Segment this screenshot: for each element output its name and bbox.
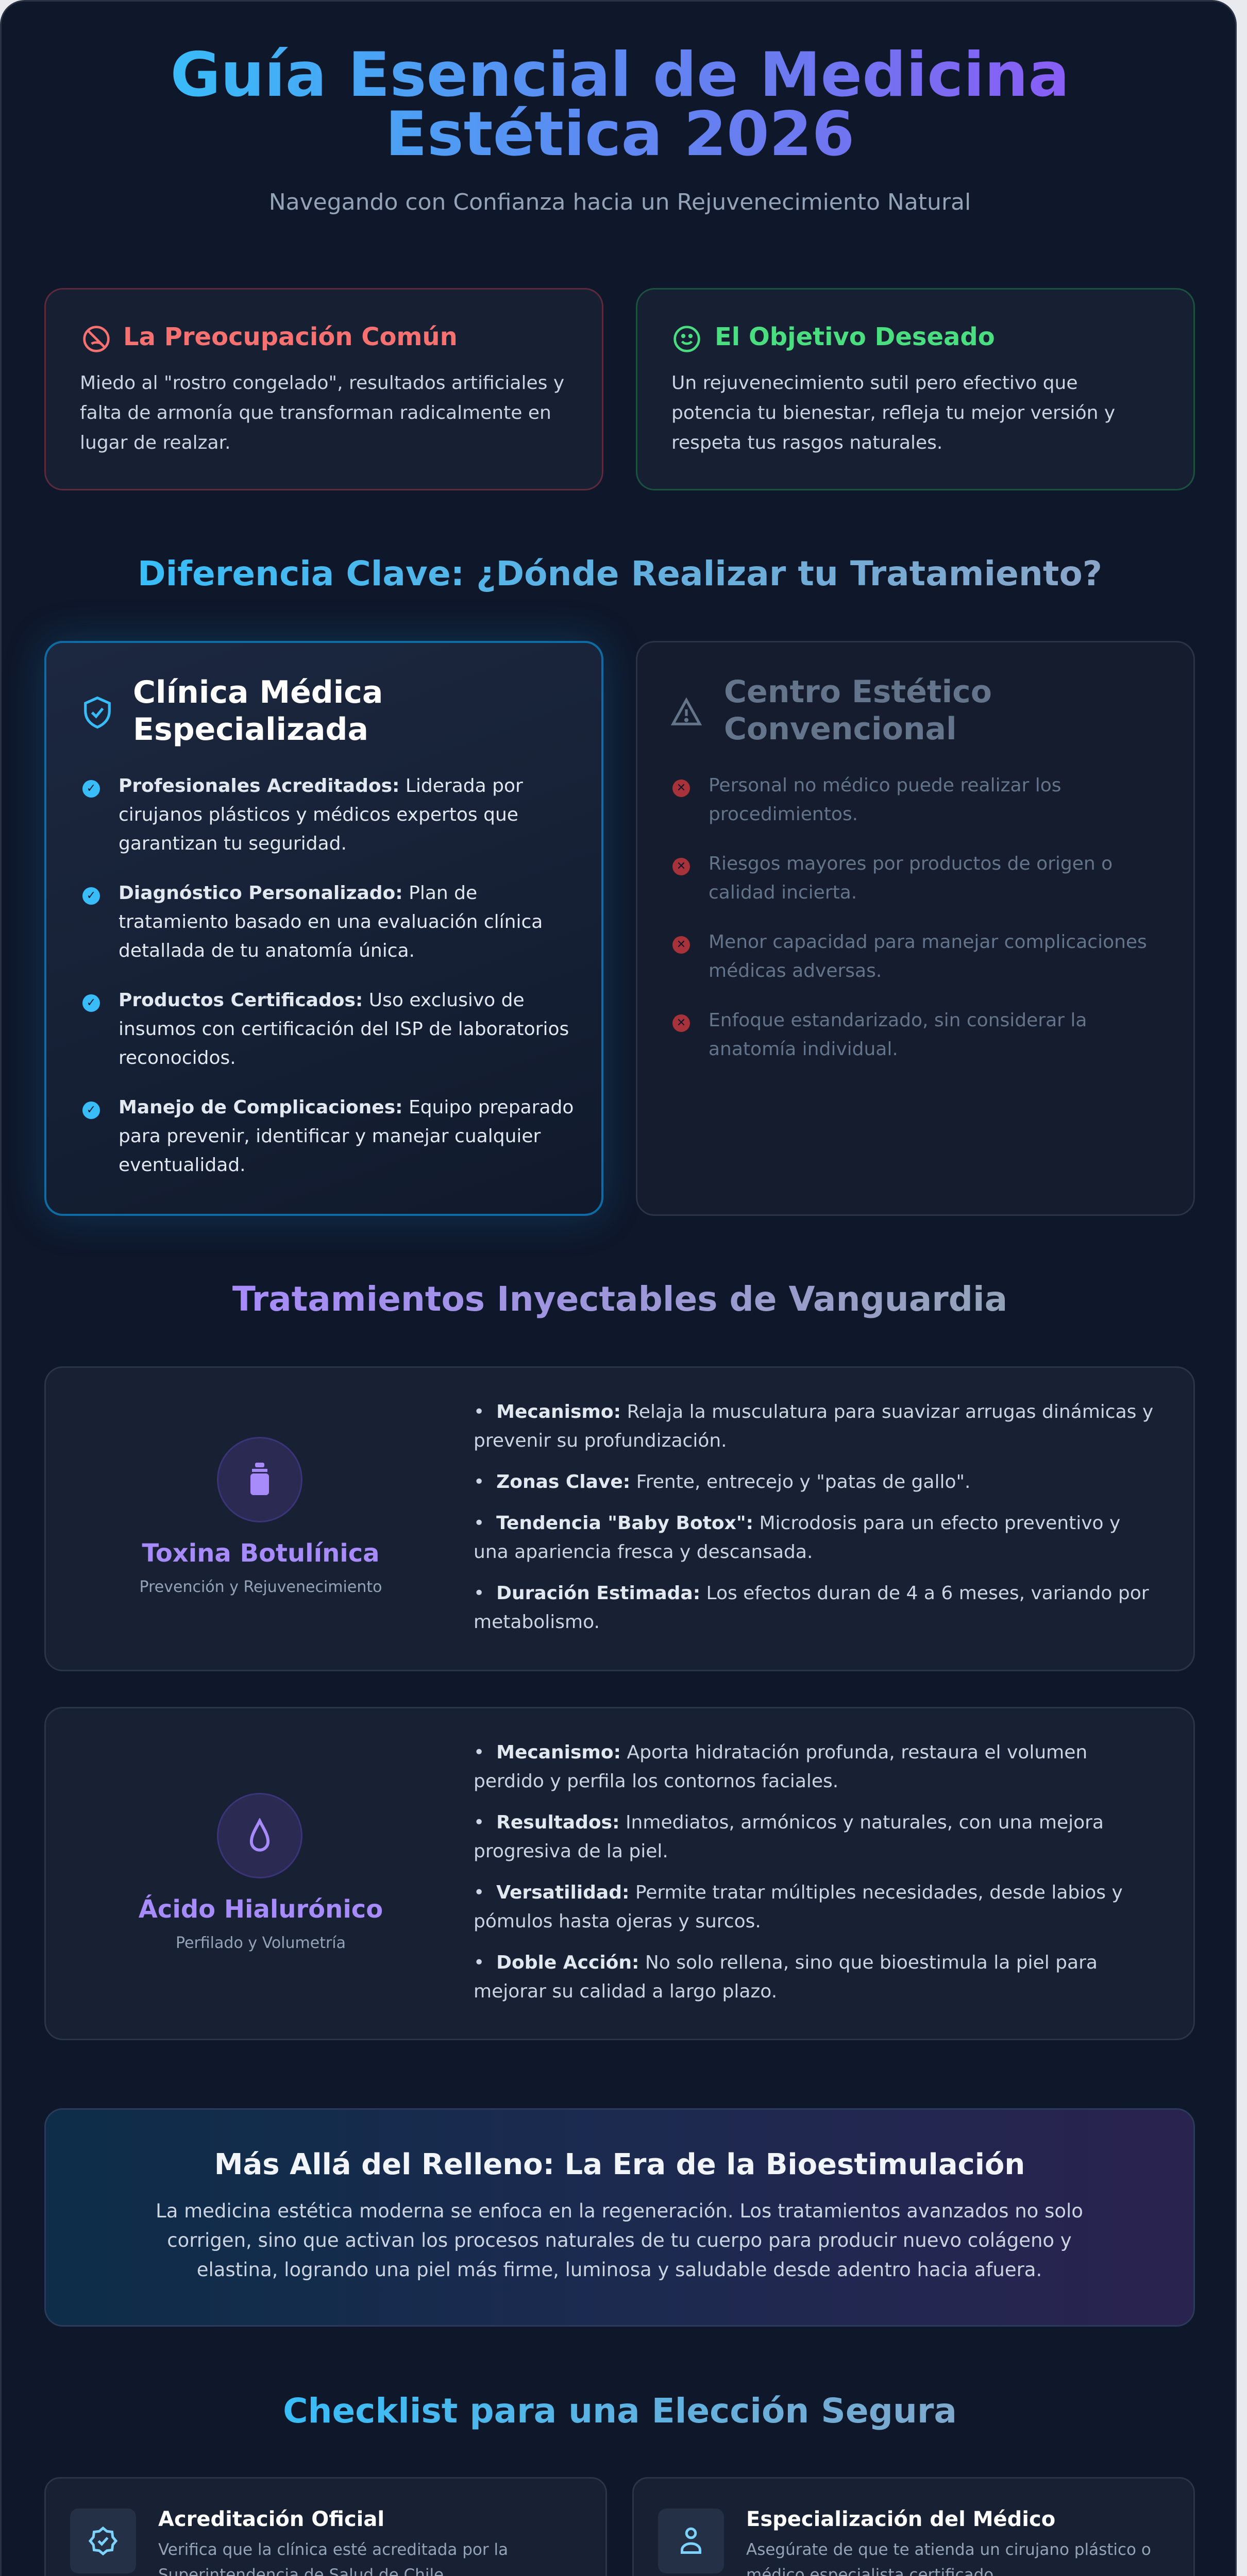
subtitle: Navegando con Confianza hacia un Rejuvenecimiento Natural	[269, 189, 971, 215]
title: Toxina Botulínica	[142, 1539, 380, 1568]
list	[82, 775, 574, 1176]
title: Estética 2026	[385, 99, 854, 170]
list: ✓	[87, 782, 96, 795]
title: Acreditación Oficial	[158, 2507, 384, 2531]
list: • Duración Estimada: Los efectos duran de 4 a 6 meses, variando por metabolismo.	[474, 1583, 1149, 1633]
subtitle: Prevención y Rejuvenecimiento	[140, 1578, 382, 1596]
list: • Resultados: Inmediatos, armónicos y naturales, con una mejora progresiva de la piel.	[474, 1812, 1104, 1862]
checklist: acreditacion	[44, 2477, 607, 2576]
title: Especialización del Médico	[746, 2507, 1055, 2531]
heading: Especializada	[133, 711, 368, 748]
list	[474, 1401, 1153, 1633]
heading	[724, 674, 992, 747]
list: ✕	[677, 860, 686, 873]
list: ✓	[87, 996, 96, 1009]
list: ✕	[677, 938, 686, 951]
list: Diagnóstico Personalizado: Plan de tratamiento basado en una evaluación clínica detallada de tu anatomía única.	[119, 883, 543, 961]
icon: smile	[673, 326, 700, 352]
heading: El Objetivo Deseado	[715, 323, 995, 351]
panel: goal	[636, 288, 1195, 490]
heading: diferencia clave: Diferencia Clave: ¿Dónde Realizar tu Tratamiento?	[138, 554, 1102, 594]
icon: person	[658, 2509, 724, 2573]
panel: centro estetico	[636, 641, 1195, 1216]
list: ✕	[677, 1016, 686, 1029]
list	[672, 775, 1147, 1060]
checklist: especializacion	[632, 2477, 1195, 2576]
panel: concern	[44, 288, 603, 490]
heading: La Preocupación Común	[123, 323, 458, 351]
heading: Convencional	[724, 711, 957, 747]
title: Ácido Hialurónico	[139, 1895, 383, 1924]
icon: no face	[83, 326, 110, 352]
heading: Centro Estético	[724, 674, 992, 710]
heading: checklist: Checklist para una Elección Segura	[283, 2391, 957, 2431]
list: Menor capacidad para manejar complicaciones médicas adversas.	[709, 931, 1147, 981]
icon: vial	[217, 1437, 302, 1522]
list: Riesgos mayores por productos de origen o calidad incierta.	[709, 853, 1113, 903]
list: Enfoque estandarizado, sin considerar la anatomía individual.	[709, 1010, 1087, 1060]
list	[474, 1742, 1123, 2002]
heading: Más Allá del Relleno: La Era de la Bioestimulación	[214, 2148, 1025, 2181]
text: Miedo al "rostro congelado", resultados artificiales y falta de armonía que transforman radicalmente en lugar de realzar.	[80, 372, 564, 453]
panel: acido hialuronico	[44, 1707, 1195, 2040]
list: • Tendencia "Baby Botox": Microdosis para un efecto preventivo y una apariencia fresca y descansada.	[474, 1513, 1120, 1563]
text: Un rejuvenecimiento sutil pero efectivo que potencia tu bienestar, refleja tu mejor versión y respeta tus rasgos naturales.	[671, 372, 1115, 453]
list: Manejo de Complicaciones: Equipo preparado para prevenir, identificar y manejar cualquier eventualidad.	[119, 1097, 574, 1176]
text: La medicina estética moderna se enfoca en la regeneración. Los tratamientos avanzados no solo corrigen, sino que activan los procesos naturales de tu cuerpo para producir nuevo colágeno y elastina, logrando una piel más firme, luminosa y saludable desde adentro hacia afuera.	[156, 2200, 1083, 2281]
subtitle: Perfilado y Volumetría	[176, 1934, 346, 1952]
heading	[133, 674, 383, 748]
title: Guía Esencial de Medicina	[170, 40, 1070, 111]
icon: shield	[84, 697, 111, 728]
list: • Doble Acción: No solo rellena, sino que bioestimula la piel para mejorar su calidad a largo plazo.	[474, 1952, 1098, 2002]
list: ✓	[87, 889, 96, 902]
icon: badge check	[70, 2509, 136, 2573]
icon: warning	[671, 698, 702, 725]
list: • Zonas Clave: Frente, entrecejo y "patas de gallo".	[474, 1471, 970, 1493]
title	[156, 46, 1084, 164]
list: Profesionales Acreditados: Liderada por cirujanos plásticos y médicos expertos que garantizan tu seguridad.	[119, 775, 523, 854]
list: • Mecanismo: Aporta hidratación profunda, restaura el volumen perdido y perfila los contornos faciales.	[474, 1742, 1087, 1792]
list: ✓	[87, 1104, 96, 1116]
list: • Versatilidad: Permite tratar múltiples necesidades, desde labios y pómulos hasta ojeras y surcos.	[474, 1882, 1123, 1932]
panel: bioestimulacion	[44, 2108, 1195, 2327]
list: Personal no médico puede realizar los procedimientos.	[709, 775, 1061, 825]
list: • Mecanismo: Relaja la musculatura para suavizar arrugas dinámicas y prevenir su profundización.	[474, 1401, 1153, 1451]
panel: clinica medica	[44, 641, 603, 1216]
list: Productos Certificados: Uso exclusivo de insumos con certificación del ISP de laboratorios reconocidos.	[119, 990, 569, 1069]
heading: tratamientos: Tratamientos Inyectables de Vanguardia	[232, 1279, 1007, 1319]
icon: drop	[217, 1793, 302, 1878]
panel: toxina botulinica	[44, 1366, 1195, 1671]
list: ✕	[677, 782, 686, 794]
heading: Clínica Médica	[133, 674, 383, 710]
